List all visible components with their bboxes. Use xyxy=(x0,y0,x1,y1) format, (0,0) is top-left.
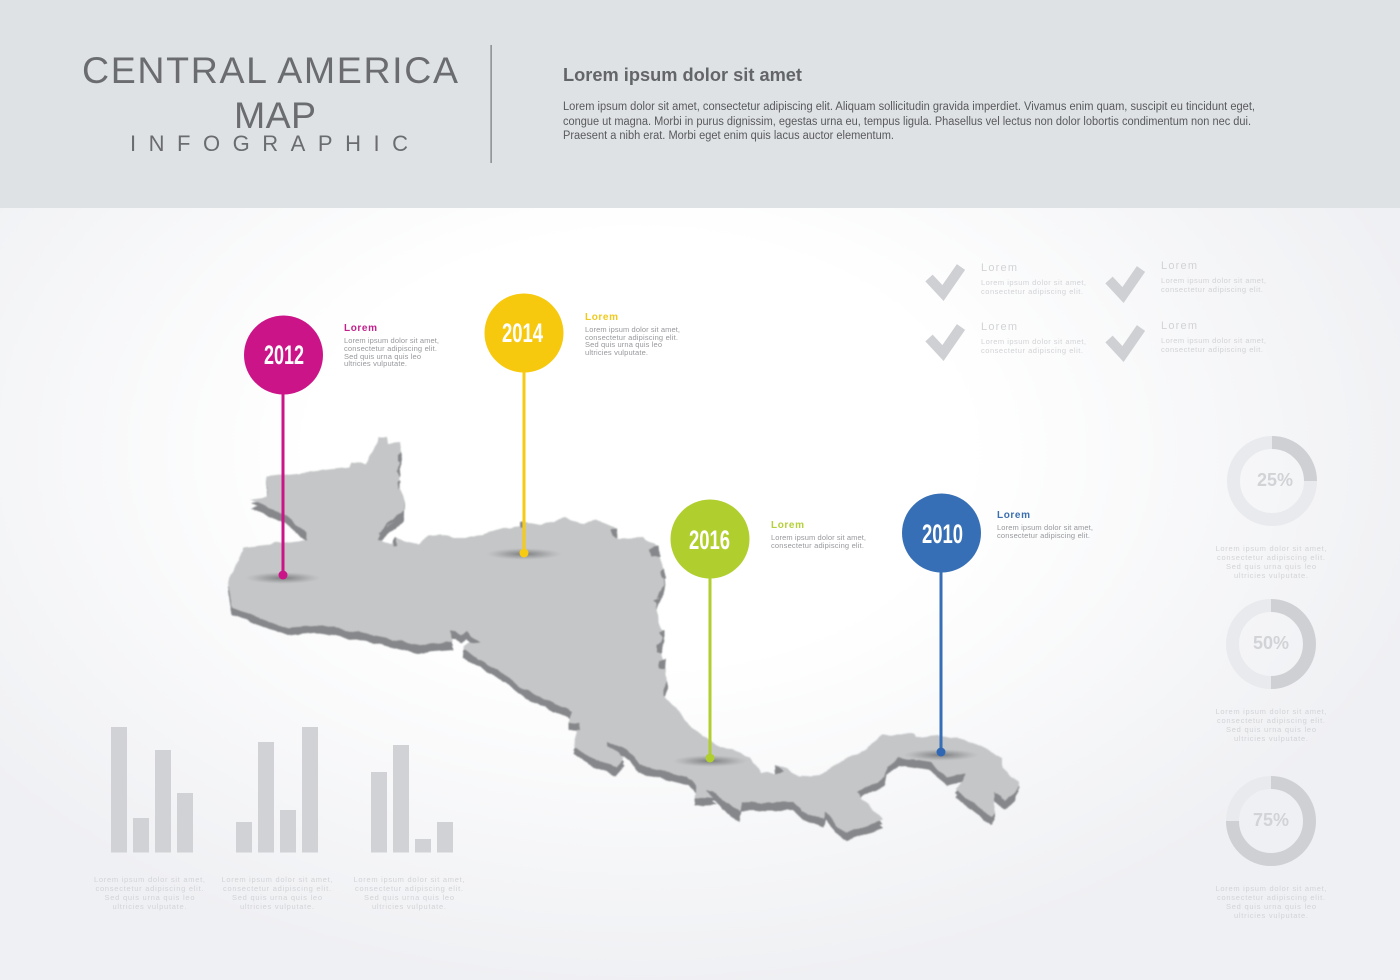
pin 2016: 2016 xyxy=(689,525,730,555)
bar chart 1 caption: Sed quis urna quis leo xyxy=(104,893,194,902)
bar chart 2 caption: ultricies vulputate. xyxy=(240,902,314,911)
checklist xyxy=(929,260,1266,355)
bar chart 2 caption xyxy=(222,875,332,911)
pin 2014: 2014 xyxy=(502,318,543,348)
donut 75% caption xyxy=(1216,884,1326,920)
check item 4: consectetur adipiscing elit. xyxy=(1161,345,1263,354)
label 2010: Lorem xyxy=(997,510,1030,521)
donut 25% caption: Lorem ipsum dolor sit amet, xyxy=(1216,544,1326,553)
donut 75% caption: ultricies vulputate. xyxy=(1234,911,1308,920)
pin 2016 xyxy=(670,500,750,767)
title: MAP xyxy=(234,94,316,136)
label 2012 xyxy=(344,323,439,368)
donut 25% caption: ultricies vulputate. xyxy=(1234,571,1308,580)
title xyxy=(82,49,458,156)
label 2014: Lorem ipsum dolor sit amet, xyxy=(585,325,680,334)
donut 50% caption xyxy=(1216,707,1326,743)
pin 2010 xyxy=(902,494,981,761)
check item 2 xyxy=(1109,260,1266,295)
label 2014: consectetur adipiscing elit. xyxy=(585,333,678,342)
bar chart 2 caption: consectetur adipiscing elit. xyxy=(223,884,331,893)
bar chart 2 caption: Lorem ipsum dolor sit amet, xyxy=(222,875,332,884)
map of Central America xyxy=(228,438,1018,841)
title: INFOGRAPHIC xyxy=(130,131,408,156)
header band xyxy=(0,0,1400,208)
bar chart 3 caption xyxy=(354,875,464,911)
check item 3 xyxy=(929,321,1086,355)
check item 1: Lorem ipsum dolor sit amet, xyxy=(981,278,1086,287)
bar chart 1 caption xyxy=(94,875,205,911)
donut 50% caption: ultricies vulputate. xyxy=(1234,734,1308,743)
bar chart 3 caption: Lorem ipsum dolor sit amet, xyxy=(354,875,464,884)
bar chart 1 xyxy=(111,727,193,852)
title: CENTRAL AMERICA xyxy=(82,49,458,91)
check item 1: consectetur adipiscing elit. xyxy=(981,287,1083,296)
check item 4: Lorem ipsum dolor sit amet, xyxy=(1161,336,1266,345)
bar chart 3 xyxy=(371,745,453,852)
label 2010 xyxy=(997,510,1093,540)
bar chart 3 caption: Sed quis urna quis leo xyxy=(364,893,454,902)
label 2012: consectetur adipiscing elit. xyxy=(344,344,437,353)
label 2016: consectetur adipiscing elit. xyxy=(771,541,864,550)
donut 50% caption: consectetur adipiscing elit. xyxy=(1217,716,1325,725)
check item 3: consectetur adipiscing elit. xyxy=(981,346,1083,355)
donut 50%: 50% xyxy=(1253,633,1289,653)
label 2012: Lorem xyxy=(344,323,377,334)
donut 25%: 25% xyxy=(1257,470,1293,490)
bar chart 2 caption: Sed quis urna quis leo xyxy=(232,893,322,902)
check item 4 xyxy=(1109,320,1266,354)
pin 2010: 2010 xyxy=(922,519,963,549)
pin 2014 xyxy=(484,294,564,560)
header intro text: Praesent a nibh erat. Morbi eget enim quis lacus auctor elementum. xyxy=(563,130,894,142)
bar chart 3 caption: consectetur adipiscing elit. xyxy=(355,884,463,893)
donut 75% xyxy=(1232,782,1310,860)
label 2014: Lorem xyxy=(585,312,618,323)
donut 75% caption: Sed quis urna quis leo xyxy=(1226,902,1316,911)
pin 2012: 2012 xyxy=(264,340,304,370)
label 2016: Lorem xyxy=(771,520,804,531)
donut 75%: 75% xyxy=(1253,810,1289,830)
donut 25% caption: Sed quis urna quis leo xyxy=(1226,562,1316,571)
donut 25% xyxy=(1234,442,1310,520)
header intro text: Lorem ipsum dolor sit amet, consectetur adipiscing elit. Aliquam sollicitudin gravida imperdiet. Vivamus enim quam, suscipit eu tincidunt eget, xyxy=(563,101,1255,113)
label 2014 xyxy=(585,312,680,357)
check item 2: Lorem ipsum dolor sit amet, xyxy=(1161,276,1266,285)
label 2014: Sed quis urna quis leo xyxy=(585,340,662,349)
header intro text xyxy=(563,65,1255,142)
label 2010: Lorem ipsum dolor sit amet, xyxy=(997,523,1093,532)
check item 4: Lorem xyxy=(1161,320,1197,332)
label 2010: consectetur adipiscing elit. xyxy=(997,531,1090,540)
label 2012: ultricies vulputate. xyxy=(344,359,407,368)
check item 1: Lorem xyxy=(981,262,1017,274)
bar chart 2 xyxy=(236,727,318,852)
donut 75% caption: Lorem ipsum dolor sit amet, xyxy=(1216,884,1326,893)
check item 3: Lorem ipsum dolor sit amet, xyxy=(981,337,1086,346)
donut 50% xyxy=(1232,606,1310,682)
check item 3: Lorem xyxy=(981,321,1017,333)
donut 50% caption: Lorem ipsum dolor sit amet, xyxy=(1216,707,1326,716)
check item 2: consectetur adipiscing elit. xyxy=(1161,285,1263,294)
pin 2012 xyxy=(244,316,323,584)
label 2014: ultricies vulputate. xyxy=(585,348,648,357)
donut 25% caption xyxy=(1216,544,1326,580)
bar chart 3 caption: ultricies vulputate. xyxy=(372,902,446,911)
header intro text: congue ut magna. Morbi in purus dignissim, egestas urna eu, tempus ligula. Phasellus vel lectus non dolor lobortis condimentum non nec dui. xyxy=(563,116,1251,128)
header intro text: Lorem ipsum dolor sit amet xyxy=(563,65,802,85)
bar chart 1 caption: consectetur adipiscing elit. xyxy=(96,884,204,893)
donut 50% caption: Sed quis urna quis leo xyxy=(1226,725,1316,734)
bar chart 1 caption: ultricies vulputate. xyxy=(112,902,186,911)
check item 2: Lorem xyxy=(1161,260,1197,272)
label 2016 xyxy=(771,520,866,550)
label 2012: Sed quis urna quis leo xyxy=(344,352,421,361)
check item 1 xyxy=(929,262,1086,296)
bar chart 1 caption: Lorem ipsum dolor sit amet, xyxy=(94,875,205,884)
label 2016: Lorem ipsum dolor sit amet, xyxy=(771,533,866,542)
donut 75% caption: consectetur adipiscing elit. xyxy=(1217,893,1325,902)
donut 25% caption: consectetur adipiscing elit. xyxy=(1217,553,1325,562)
label 2012: Lorem ipsum dolor sit amet, xyxy=(344,336,439,345)
